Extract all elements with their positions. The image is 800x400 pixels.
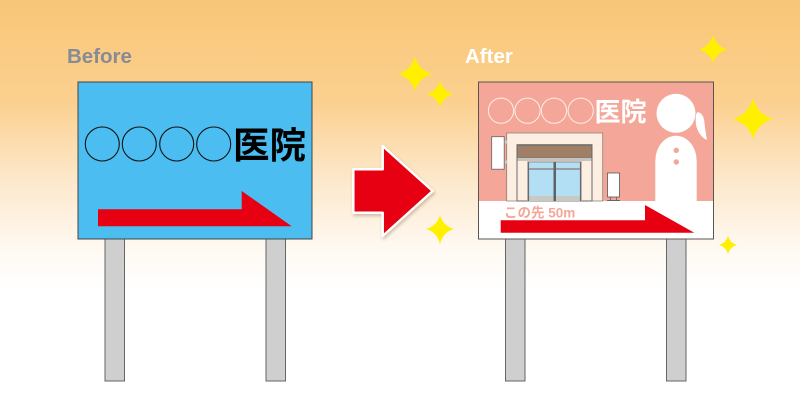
sparkle [719,236,737,254]
sparkle [699,35,727,63]
standing sign base [607,197,620,200]
clinic name text: 医院 [233,125,306,166]
head [656,94,696,133]
building wall [507,133,603,201]
left post [105,239,124,381]
clinic building [507,133,603,201]
door transom [529,168,580,170]
door threshold [529,196,580,201]
right post [666,239,686,381]
sparkle [398,57,432,91]
red direction arrow [98,191,292,226]
clinic name text: 医院 [594,97,647,127]
background gradient [0,0,800,290]
door centre mullion [554,162,556,201]
hanging sign brackets [504,142,507,162]
sign border [478,82,714,239]
red direction arrow [501,205,694,233]
heading: After: After [465,45,513,68]
standing sign [607,173,620,200]
sparkle [427,81,453,107]
canopy [518,158,592,161]
sparkles [398,35,773,254]
body [655,136,697,201]
hanging sign board [492,137,504,169]
person figure [655,94,707,201]
hanging sign [492,137,507,169]
before signboard [78,82,312,381]
door frame side bars [528,162,580,201]
white sign panel [478,82,714,239]
entrance frame [517,145,592,201]
sparkle [733,98,773,139]
brown fascia [518,146,592,158]
ponytail [696,112,707,140]
placeholder circles [85,127,231,161]
right post [266,239,286,381]
heading: Before: Before [67,45,132,68]
big red arrow [353,146,433,236]
glass doors [528,162,581,201]
distance text: この先 50m [504,204,575,220]
pink upper area [478,82,714,201]
left post [506,239,525,381]
blue sign panel [78,82,312,239]
standing sign board [608,173,620,197]
buttons [674,148,679,165]
after signboard [478,82,714,381]
placeholder circles [488,98,593,123]
sparkle [426,215,454,244]
